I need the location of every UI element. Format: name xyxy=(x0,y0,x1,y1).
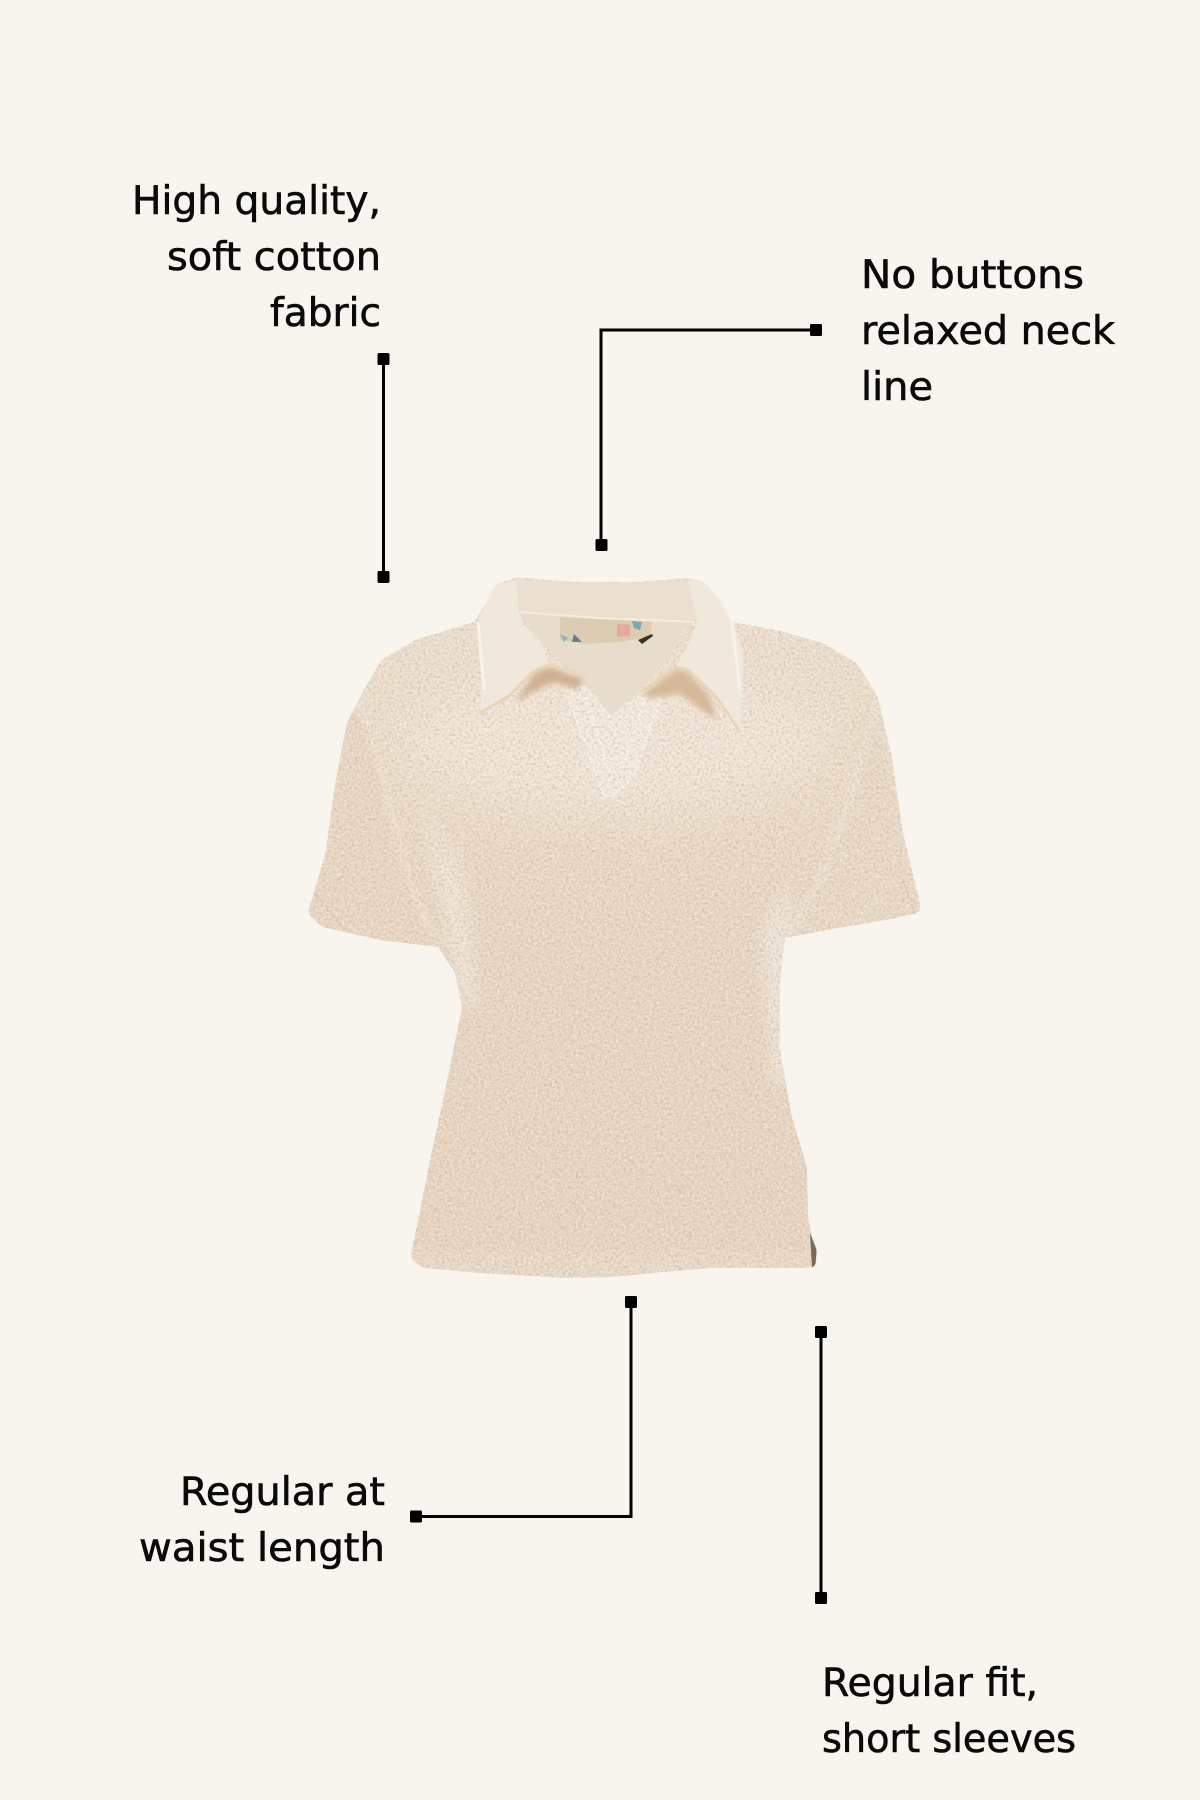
collar lower edge left xyxy=(480,665,583,713)
label text: Regular at xyxy=(180,1470,385,1515)
left side seam light xyxy=(434,835,480,1006)
placket xyxy=(568,686,658,796)
callout: waist length xyxy=(139,1296,637,1571)
label text: Regular fit, xyxy=(822,1661,1038,1706)
callout: no buttons neck line xyxy=(596,253,1115,551)
right collar leaf xyxy=(676,580,743,730)
label text: fabric xyxy=(270,291,381,336)
label text: soft cotton xyxy=(167,235,381,280)
knit shadow texture xyxy=(300,570,930,1290)
hem slit xyxy=(810,1233,817,1268)
label text: short sleeves xyxy=(822,1717,1076,1762)
label text xyxy=(132,179,381,336)
right side seam light xyxy=(762,880,790,1090)
collar stand xyxy=(516,580,700,622)
shoulder seams xyxy=(367,720,872,942)
label text: No buttons xyxy=(861,253,1084,298)
label text: waist length xyxy=(139,1526,385,1571)
connector xyxy=(378,353,390,583)
left collar leaf xyxy=(478,580,549,713)
label text xyxy=(861,253,1115,410)
label text: High quality, xyxy=(132,179,381,224)
inside back of shirt xyxy=(518,610,690,716)
under-collar shadow right xyxy=(642,669,716,720)
collar fold lines xyxy=(478,622,740,690)
callout: high quality fabric xyxy=(132,179,390,583)
connector xyxy=(815,1326,827,1604)
neck tape xyxy=(520,612,695,622)
knit light texture xyxy=(300,570,930,1290)
label text xyxy=(822,1661,1076,1762)
under-collar shadow left xyxy=(516,667,583,702)
label text xyxy=(139,1470,385,1571)
shirt illustration xyxy=(300,570,930,1290)
placket stitching xyxy=(566,690,661,798)
chest highlight xyxy=(421,683,810,808)
label text: relaxed neck xyxy=(861,309,1115,354)
shirt body silhouette xyxy=(307,577,920,1278)
cuff folds xyxy=(314,880,915,930)
left sleeve shading xyxy=(328,710,366,929)
connector xyxy=(596,324,822,551)
collar lower edge right xyxy=(640,667,739,730)
label text: line xyxy=(861,365,933,410)
right sleeve shading xyxy=(854,925,855,926)
brand label xyxy=(560,617,653,644)
infographic page xyxy=(136,184,1116,1753)
connector xyxy=(410,1296,637,1522)
callout: regular fit short sleeves xyxy=(815,1326,1076,1762)
hem band xyxy=(438,1269,672,1278)
